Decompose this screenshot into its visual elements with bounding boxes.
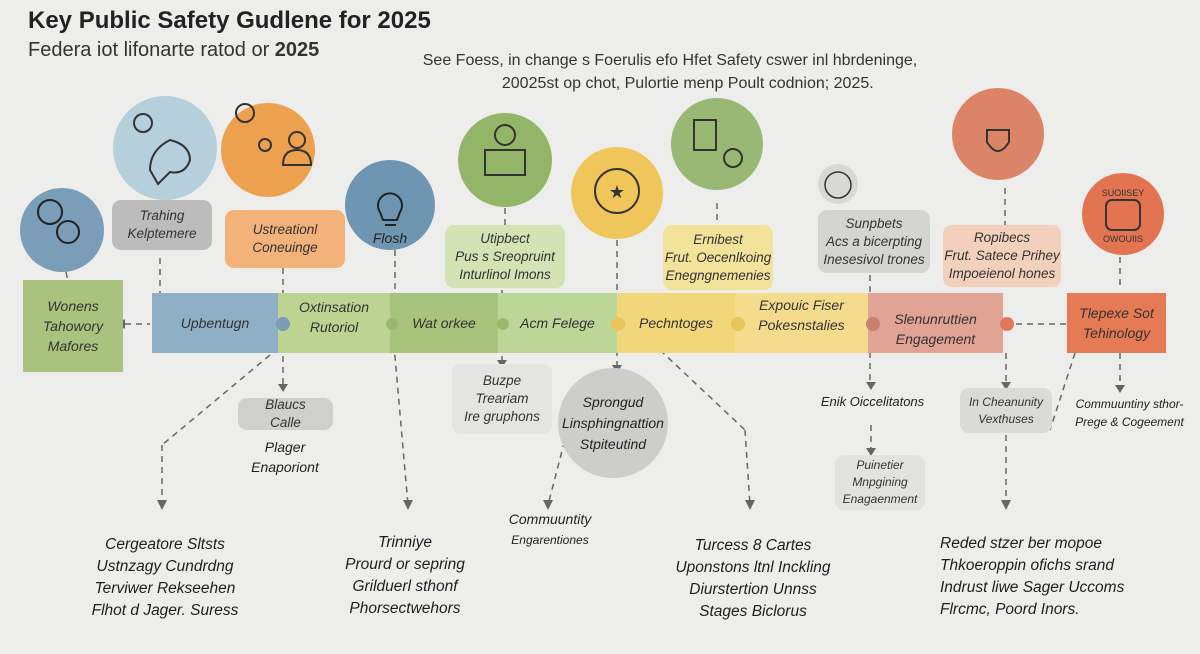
box: Blaucs: Blaucs xyxy=(265,397,306,412)
text: Plager: Enaporiont xyxy=(251,459,319,475)
segment: Wonens: Mafores xyxy=(48,338,98,354)
title: Key Public Safety Gudlene for 2025 xyxy=(28,7,431,34)
text block: Reded xyxy=(940,535,1124,618)
icon: emblem: OWOUIIS xyxy=(1103,234,1143,244)
text block: Turcess: Diurstertion Unnss xyxy=(689,581,817,598)
segment: technology xyxy=(1067,293,1166,353)
segment: technology: Tlepexe Sot xyxy=(1079,305,1154,321)
box: Training xyxy=(112,200,212,250)
segment: technology: Tehinology xyxy=(1083,325,1150,341)
box: Sunpbets: Inesesivol trones xyxy=(823,252,925,266)
text block: Cergeatore: Flhot d Jager. Suress xyxy=(92,602,238,619)
text: Enik: Enik Oiccelitatons xyxy=(821,394,924,409)
box: Ropibecs: Frut. Satece Prihey xyxy=(944,248,1060,263)
segment: Expouic xyxy=(735,293,868,353)
text block: Turcess xyxy=(675,537,831,620)
box: Ropibecs: Impoeienol hones xyxy=(949,266,1055,281)
box: Utipbect xyxy=(445,225,565,288)
segment: Wonens: Wonens xyxy=(47,298,99,314)
box: In Cheanunity: Vexthuses xyxy=(978,412,1034,426)
text: Community other: Prege & Cogeement xyxy=(1075,415,1184,429)
box: Ernibest: Ernibest xyxy=(693,232,743,246)
box: Utipbect: Inturlinol Imons xyxy=(459,266,551,282)
text block: Reded: Reded stzer ber mopoe xyxy=(940,535,1102,552)
segment: Wonens xyxy=(23,280,123,372)
text block: Cergeatore: Terviwer Rekseehen xyxy=(95,580,235,597)
segment: Pechntoges: Pechntoges xyxy=(639,315,713,331)
box: Ropibecs: Ropibecs xyxy=(974,230,1030,245)
circle: Sprongud: Sprongud xyxy=(583,394,643,410)
box: Utipbect: Pus s Sreopruint xyxy=(455,248,555,264)
box: Buzpe: Buzpe xyxy=(483,373,521,388)
text: Community other: Commuuntiny sthor- xyxy=(1076,397,1183,411)
text: Community xyxy=(509,511,592,547)
text block: Cergeatore: Cergeatore Sltsts xyxy=(105,536,225,553)
box: Ustreational: Coneuinge xyxy=(252,240,318,255)
text block: Trinniye: Phorsectwehors xyxy=(349,600,461,617)
text: Community other xyxy=(1075,397,1184,429)
text block: Turcess: Uponstons ltnl Inckling xyxy=(675,559,831,576)
box: Sunpbets: Acs a bicerpting xyxy=(826,234,922,248)
segment: Wat orkee: Wat orkee xyxy=(412,315,476,331)
segment: Oxtinsation: Rutoriol xyxy=(310,319,358,335)
text block: Trinniye: Grilduerl sthonf xyxy=(352,578,458,595)
segment: Pechntoges xyxy=(617,293,735,353)
icon: officer xyxy=(458,113,552,207)
box: Ropibecs xyxy=(943,225,1061,287)
text block: Reded: Thkoeroppin ofichs srand xyxy=(940,557,1114,574)
text block: Trinniye: Prourd or sepring xyxy=(345,556,465,573)
text block: Cergeatore xyxy=(92,536,238,619)
circle: Sprongud: Linsphingnattion xyxy=(562,414,664,430)
text block: Turcess: Stages Biclorus xyxy=(699,603,807,620)
text block: Cergeatore: Ustnzagy Cundrdng xyxy=(96,558,234,575)
segment: Upbentugn xyxy=(152,293,278,353)
segment: Upbentugn: Upbentugn xyxy=(181,315,249,331)
box: Ernibest: Frut. Oecenlkoing xyxy=(665,250,771,264)
segment: Expouic: Pokesnstalies xyxy=(758,317,845,333)
box: Puinetier: Enagaenment xyxy=(843,492,917,506)
icon: small seal xyxy=(818,164,858,204)
box: Sunpbets: Sunpbets xyxy=(845,216,903,230)
icon: gears xyxy=(20,188,104,272)
segment: Oxtinsation: Oxtinsation xyxy=(299,299,369,315)
icon: emblem xyxy=(1082,173,1164,255)
text block: Turcess: Turcess 8 Cartes xyxy=(695,537,811,554)
icon: certificate xyxy=(671,98,763,190)
intro text: See Foess, in change s Foerulis efo Hfet Safety cswer inl hbrdeninge, xyxy=(423,52,917,69)
box: Sunpbets xyxy=(818,210,930,273)
text: Plager: Plager xyxy=(265,439,305,455)
box: Ustreational xyxy=(225,210,345,268)
circle: Sprongud xyxy=(558,368,668,478)
box: Ustreational: Ustreationl xyxy=(253,222,317,237)
text block: Reded: Indrust liwe Sager Uccoms xyxy=(940,579,1124,596)
box: Buzpe xyxy=(452,364,552,434)
icon: lightbulb xyxy=(345,160,435,250)
segment: engagement xyxy=(868,293,1003,353)
box: Blaucs: Calle xyxy=(270,415,301,430)
segment: Wat orkee xyxy=(390,293,498,353)
box: Utipbect: Utipbect xyxy=(480,230,530,246)
text block: Trinniye: Trinniye xyxy=(378,534,432,551)
box: Puinetier xyxy=(835,455,925,510)
segment: Expouic: Expouic Fiser xyxy=(759,297,844,313)
segment: engagement: Engagement xyxy=(896,331,975,347)
box: Puinetier: Puinetier xyxy=(856,458,904,472)
text block: Reded: Flrcmc, Poord Inors. xyxy=(940,601,1080,618)
segment: engagement: Slenunruttien xyxy=(894,311,977,327)
segment: Acm Felege xyxy=(498,293,617,353)
icon: badge yellow xyxy=(571,147,663,239)
icon: people orange xyxy=(221,103,315,197)
segment: Oxtinsation xyxy=(278,293,390,353)
box: Training: Kelptemere xyxy=(127,226,197,241)
box: Blaucs xyxy=(238,398,333,430)
icon: gears and chat xyxy=(113,96,217,200)
subtitle: Federa iot lifonarte ratod or 2025 xyxy=(28,39,319,61)
text block: Trinniye xyxy=(345,534,465,617)
box: Ernibest xyxy=(663,225,773,290)
box: Buzpe: Treariam xyxy=(475,391,528,406)
box: In Cheanunity: In Cheanunity xyxy=(969,394,1043,408)
segment: Wonens: Tahowory xyxy=(43,318,103,334)
text: Community: Engarentiones xyxy=(511,533,589,547)
box: In Cheanunity xyxy=(960,388,1052,433)
intro text xyxy=(423,52,917,92)
box: Puinetier: Mnpgining xyxy=(852,475,908,489)
icon: shield xyxy=(952,88,1044,180)
box: Training: Trahing xyxy=(140,208,184,223)
segment: Acm Felege: Acm Felege xyxy=(520,315,595,331)
box: Buzpe: Ire gruphons xyxy=(464,409,540,424)
icon: badge yellow: ★ xyxy=(609,182,625,202)
icon: emblem: SUOIISEY xyxy=(1102,188,1144,198)
text: Flosh: Flosh xyxy=(373,230,407,246)
text: Plager xyxy=(251,439,320,475)
text: Community: Commuuntity xyxy=(509,511,591,527)
box: Ernibest: Enegngnemenies xyxy=(665,268,771,282)
intro text: 20025st op chot, Pulortie menp Poult codnion; 2025. xyxy=(502,75,874,92)
circle: Sprongud: Stpiteutind xyxy=(580,436,646,452)
